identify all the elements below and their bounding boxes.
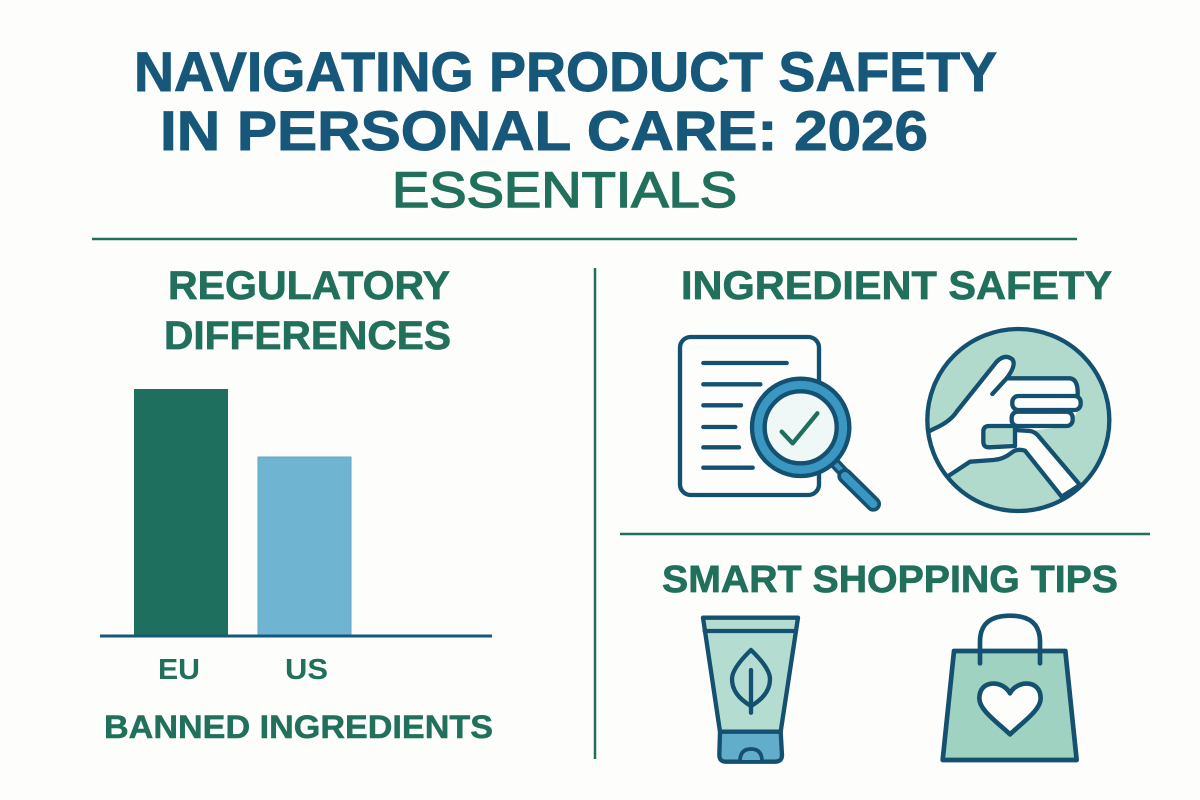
bar chart	[100, 389, 492, 686]
panel: regulatory differences	[100, 264, 493, 745]
title: NAVIGATING PRODUCT SAFETY	[134, 40, 997, 103]
title: ESSENTIALS	[392, 162, 737, 218]
bar chart: US	[285, 654, 328, 686]
icon: document with magnifier	[680, 337, 873, 504]
heading: regulatory differences	[164, 264, 451, 358]
panel: smart shopping tips	[662, 559, 1118, 762]
bar chart: EU	[158, 654, 200, 686]
heading: smart shopping tips: SMART SHOPPING TIPS	[662, 559, 1118, 601]
heading: regulatory differences: REGULATORY	[168, 264, 450, 308]
chart caption: BANNED INGREDIENTS	[104, 709, 493, 745]
icon: hand patch test	[922, 329, 1109, 511]
icon: leaf tube	[703, 618, 798, 762]
title	[134, 40, 997, 218]
title: IN PERSONAL CARE: 2026	[160, 99, 928, 162]
heading: ingredient safety: INGREDIENT SAFETY	[681, 264, 1112, 308]
heading: regulatory differences: DIFFERENCES	[164, 314, 451, 358]
icon: shopping bag with heart	[943, 616, 1077, 760]
panel: ingredient safety	[680, 264, 1112, 511]
